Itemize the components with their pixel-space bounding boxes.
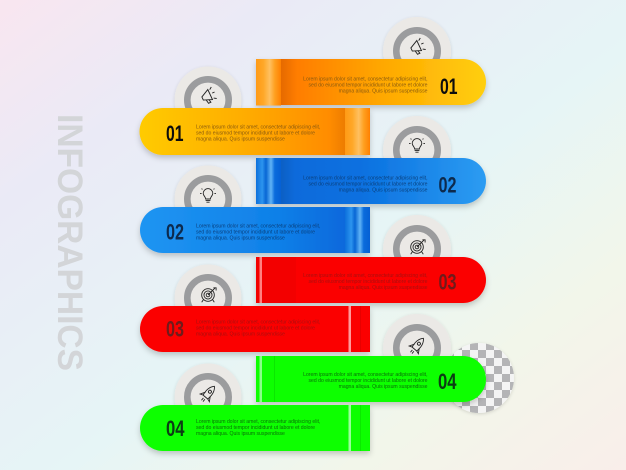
panel: right 02 blue: 02 xyxy=(438,172,456,198)
panel: left 03 red: magna aliqua. Quis ipsum suspendisse xyxy=(196,332,285,338)
panel: left 01 orange: magna aliqua. Quis ipsum suspendisse xyxy=(196,136,285,142)
panel: left 04 green: 04 xyxy=(166,416,185,441)
badge: left 04 rocket xyxy=(174,364,242,430)
panel: left 02 blue xyxy=(140,207,370,253)
panel: right 04 green: 04 xyxy=(438,369,457,394)
panel: right 04 green: magna aliqua. Quis ipsum suspendisse xyxy=(339,384,428,390)
panel: left 03 red xyxy=(140,306,370,352)
panel: left 02 blue: 02 xyxy=(166,220,184,244)
panel: right 01 orange: sed do eiusmod tempor incididunt ut labore et dolore xyxy=(308,82,428,88)
transparency checker circle xyxy=(444,343,514,413)
panel: left 04 green: sed do eiusmod tempor incididunt ut labore et dolore xyxy=(196,425,315,431)
panel: left 01 orange: Lorem ipsum dolor sit amet, consectetur adipiscing elit, xyxy=(196,124,320,130)
panel: left 04 green: magna aliqua. Quis ipsum suspendisse xyxy=(196,431,285,437)
panel: right 03 red: 03 xyxy=(438,270,456,294)
panel: left 01 orange: 01 xyxy=(166,121,184,146)
panel: right 01 orange: magna aliqua. Quis ipsum suspendisse xyxy=(339,88,428,94)
badge: left 03 target xyxy=(174,264,242,332)
badge: right 02 bulb xyxy=(383,116,451,184)
panel: right 04 green: sed do eiusmod tempor incididunt ut labore et dolore xyxy=(308,378,428,384)
panel: left 02 blue: sed do eiusmod tempor incididunt ut labore et dolore xyxy=(196,230,315,236)
badge: right 01 megaphone xyxy=(383,17,451,85)
badge: right 04 rocket xyxy=(383,314,451,382)
panel: right 04 green: Lorem ipsum dolor sit amet, consectetur adipiscing elit, xyxy=(303,372,428,378)
panel: left 04 green xyxy=(140,405,370,451)
panel: right 02 blue xyxy=(256,158,486,204)
badge: left 02 bulb xyxy=(174,166,242,232)
panel: right 01 orange: 01 xyxy=(440,74,458,99)
panel: left 03 red: Lorem ipsum dolor sit amet, consectetur adipiscing elit, xyxy=(196,320,320,326)
badge: left 01 megaphone xyxy=(174,66,242,134)
panel: right 01 orange xyxy=(256,59,486,106)
panel: right 03 red xyxy=(256,257,486,303)
panel: right 02 blue: magna aliqua. Quis ipsum suspendisse xyxy=(339,188,428,194)
panel: left 04 green: Lorem ipsum dolor sit amet, consectetur adipiscing elit, xyxy=(196,419,320,425)
panel: right 01 orange: Lorem ipsum dolor sit amet, consectetur adipiscing elit, xyxy=(303,76,428,82)
panel: left 02 blue: magna aliqua. Quis ipsum suspendisse xyxy=(196,236,285,242)
panel: left 02 blue: Lorem ipsum dolor sit amet, consectetur adipiscing elit, xyxy=(196,224,320,230)
panel: right 04 green xyxy=(256,356,486,402)
panel: right 02 blue: sed do eiusmod tempor incididunt ut labore et dolore xyxy=(308,182,428,188)
badge: right 03 target xyxy=(383,215,451,283)
panel: right 03 red: sed do eiusmod tempor incididunt ut labore et dolore xyxy=(308,279,428,285)
panel: left 03 red: 03 xyxy=(166,316,184,342)
vertical title: INFOGRAPHICS xyxy=(50,114,89,371)
panel: right 02 blue: Lorem ipsum dolor sit amet, consectetur adipiscing elit, xyxy=(303,176,428,182)
panel: left 01 orange xyxy=(140,108,370,155)
panel: left 03 red: sed do eiusmod tempor incididunt ut labore et dolore xyxy=(196,326,315,332)
panel: right 03 red: magna aliqua. Quis ipsum suspendisse xyxy=(339,285,428,291)
panel: right 03 red: Lorem ipsum dolor sit amet, consectetur adipiscing elit, xyxy=(303,273,428,279)
panel: left 01 orange: sed do eiusmod tempor incididunt ut labore et dolore xyxy=(196,130,315,136)
